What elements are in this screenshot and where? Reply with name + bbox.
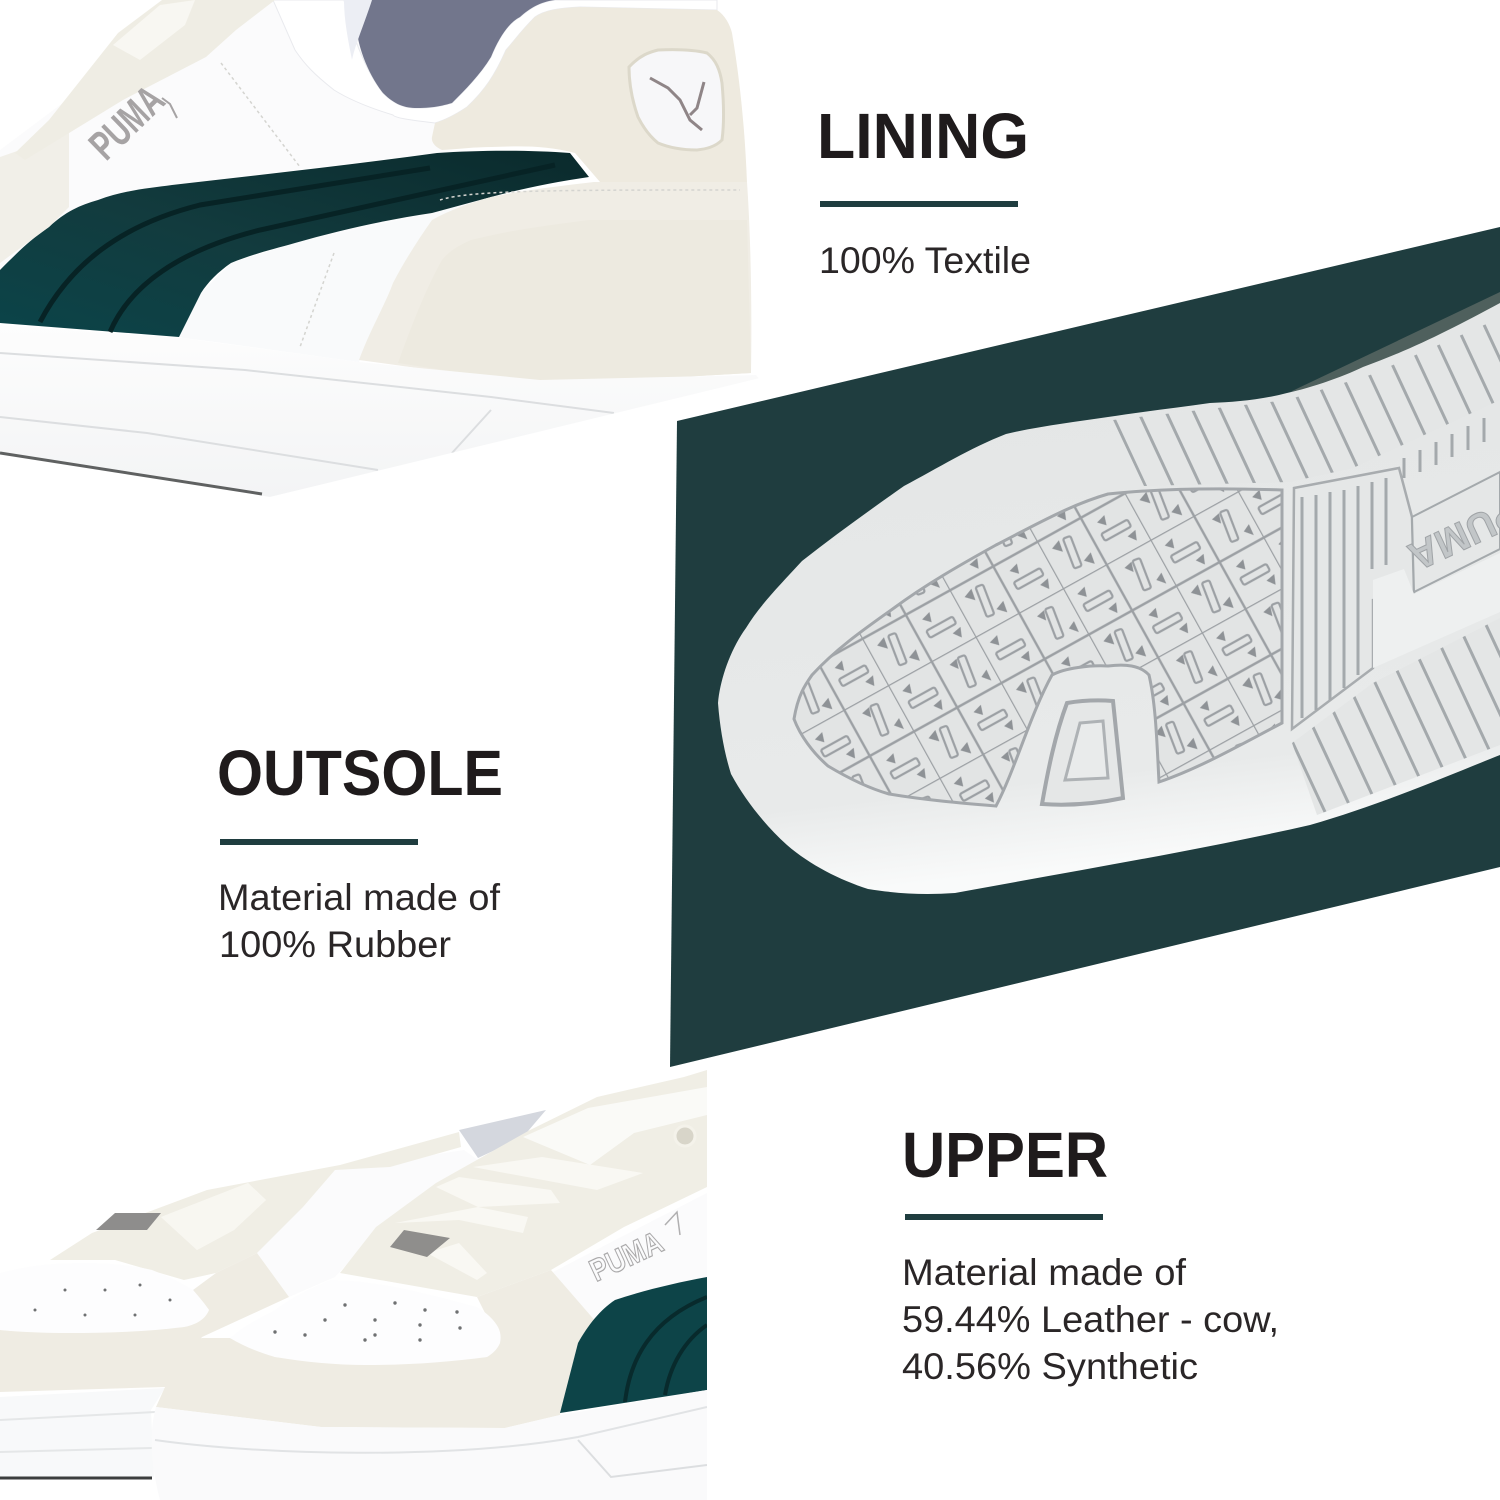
sole body [718,303,1500,894]
lace area suede [15,0,275,160]
stitching [221,63,740,347]
rule: lining [820,201,1018,207]
metal lace plate left [96,1213,161,1230]
eyelet [676,1128,694,1144]
right white side panel [551,1193,707,1323]
upper peeking above sole [1290,292,1500,392]
left white side panel [257,1150,478,1297]
perforations [34,1284,462,1342]
vent ticks [1404,418,1484,478]
right shoe stripe [560,1277,707,1413]
left shoe eyestay suede [50,1132,461,1280]
rule: upper [905,1214,1103,1220]
logo panel [1412,472,1500,592]
text: lining material: 100% Textile [819,240,1031,281]
midsole [0,332,687,497]
heel tab [432,7,747,183]
metal lace plate right [390,1230,450,1257]
light panel [1373,553,1500,668]
right toe box [231,1312,500,1365]
right eyestay suede [340,1070,707,1297]
midfoot ribs [1302,478,1386,718]
panel: dark green background [670,227,1500,1067]
logo patch [629,50,724,150]
laces [395,1157,643,1280]
PUMA logo: PUMA [80,76,173,169]
forefoot tread [802,490,1280,804]
photo: heel of shoe [0,0,760,497]
rule: outsole [220,839,418,845]
white upper [0,0,575,363]
arch notch [1042,700,1123,805]
text: upper material: 40.56% Synthetic [902,1346,1198,1387]
tongue [523,1087,707,1165]
left shoe suede [0,1253,289,1392]
heel rib band [1113,318,1500,486]
text: outsole material: 100% Rubber [219,924,451,965]
heading: upper: UPPER [902,1119,1108,1191]
collar band [273,0,717,123]
photo: outsole [718,292,1500,894]
right midsole [152,1390,707,1449]
heading: outsole: OUTSOLE [217,737,503,809]
icon: puma cat [650,78,704,130]
PUMA logo: PUMA [585,1225,669,1289]
text: upper material: Material made of [902,1252,1187,1293]
text: outsole material: Material made of [218,877,501,918]
photo: front of pair [0,1070,707,1500]
side stripe [0,151,589,337]
heel counter suede [359,182,751,385]
toe-side suede [0,133,69,263]
left midsole [0,1388,165,1477]
heading: lining: LINING [817,100,1029,172]
lower rib band [1292,618,1500,815]
text: upper material: 59.44% Leather - cow, [902,1299,1279,1340]
midfoot block [1292,468,1414,729]
right shoe suede side [156,1270,597,1428]
left shoe laces [161,1183,266,1250]
lining gap [459,1110,546,1158]
left shoe toe box [0,1263,209,1333]
lining interior [356,0,555,108]
